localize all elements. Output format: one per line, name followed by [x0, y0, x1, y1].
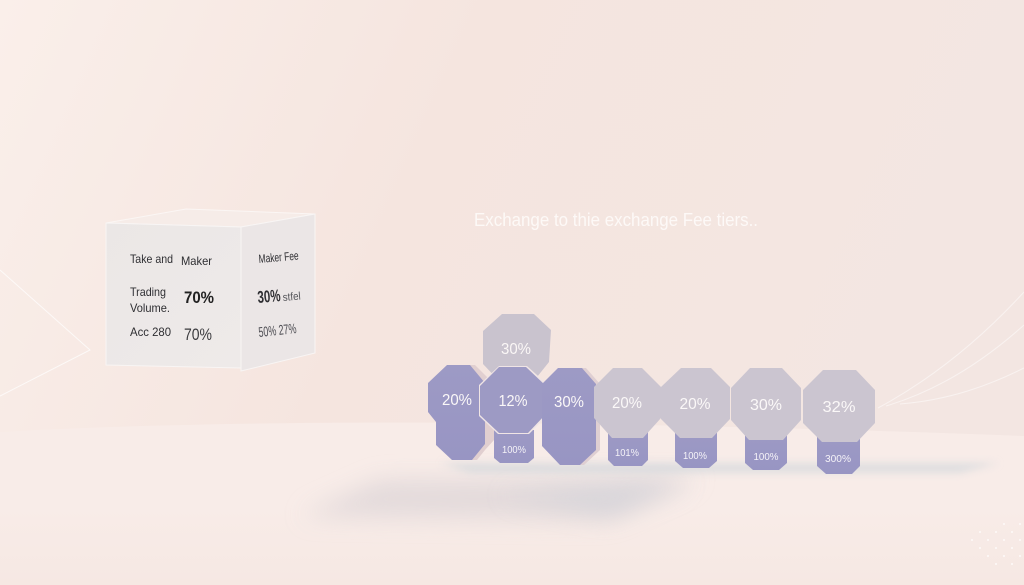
table text front: 70% — [184, 288, 214, 307]
decorative lines right — [878, 292, 1024, 408]
table text side — [257, 249, 301, 340]
table text side: 50% 27% — [258, 320, 297, 340]
tier: 20% with 100% tab: 20% — [680, 396, 710, 413]
decorative lines left — [0, 270, 90, 396]
decorative dots bottom right — [971, 523, 1021, 565]
tier: 30% with 100% tab: 100% — [754, 451, 778, 463]
cube top face — [106, 209, 315, 227]
tier: 20% with 100% tab — [661, 368, 730, 468]
tier: 30% with 100% tab — [731, 368, 801, 470]
tier: 30% tall purple: 30% — [554, 394, 584, 411]
cube front face — [106, 223, 241, 368]
tier: 20% tall purple — [428, 365, 494, 460]
panel: glass cube fee table — [106, 209, 315, 371]
cube right face — [241, 214, 315, 371]
tier: 12% with 100% tab — [479, 366, 547, 463]
tier: 20% with 101% tab — [594, 368, 661, 466]
tier: 32% with 300% tab — [803, 370, 875, 474]
table text front: Acc 280 — [130, 325, 171, 339]
table text side: stfel — [282, 290, 301, 304]
table text front: Volume. — [130, 301, 170, 315]
table text side: Maker Fee — [258, 249, 299, 266]
tier: 32% with 300% tab: 300% — [825, 453, 851, 465]
tier: top 30%: 30% — [501, 341, 531, 358]
table text side: 30% — [257, 286, 281, 307]
table text front: Take and — [130, 252, 173, 266]
tier: 20% with 101% tab: 20% — [612, 395, 642, 412]
tier: 20% with 101% tab: 101% — [615, 447, 639, 459]
tier: 32% with 300% tab: 32% — [822, 399, 856, 416]
table text front: 70% — [184, 325, 212, 344]
chart: fee tier octagons — [428, 314, 875, 474]
tier: 12% with 100% tab: 12% — [498, 393, 528, 410]
tier: 20% with 100% tab: 100% — [683, 450, 707, 462]
tier: 30% tall purple — [542, 368, 600, 465]
tier: 20% tall purple: 20% — [442, 392, 472, 409]
floor shadow — [300, 463, 1000, 520]
table text front — [130, 252, 214, 344]
tier: top 30% — [483, 314, 551, 382]
tier: 30% with 100% tab: 30% — [750, 397, 782, 414]
table text front: Maker — [181, 254, 212, 268]
title: Exchange to thie exchange Fee tiers.. — [474, 209, 758, 230]
floor — [0, 423, 1024, 585]
table text front: Trading — [130, 285, 166, 299]
tier: 12% with 100% tab: 100% — [502, 444, 526, 456]
